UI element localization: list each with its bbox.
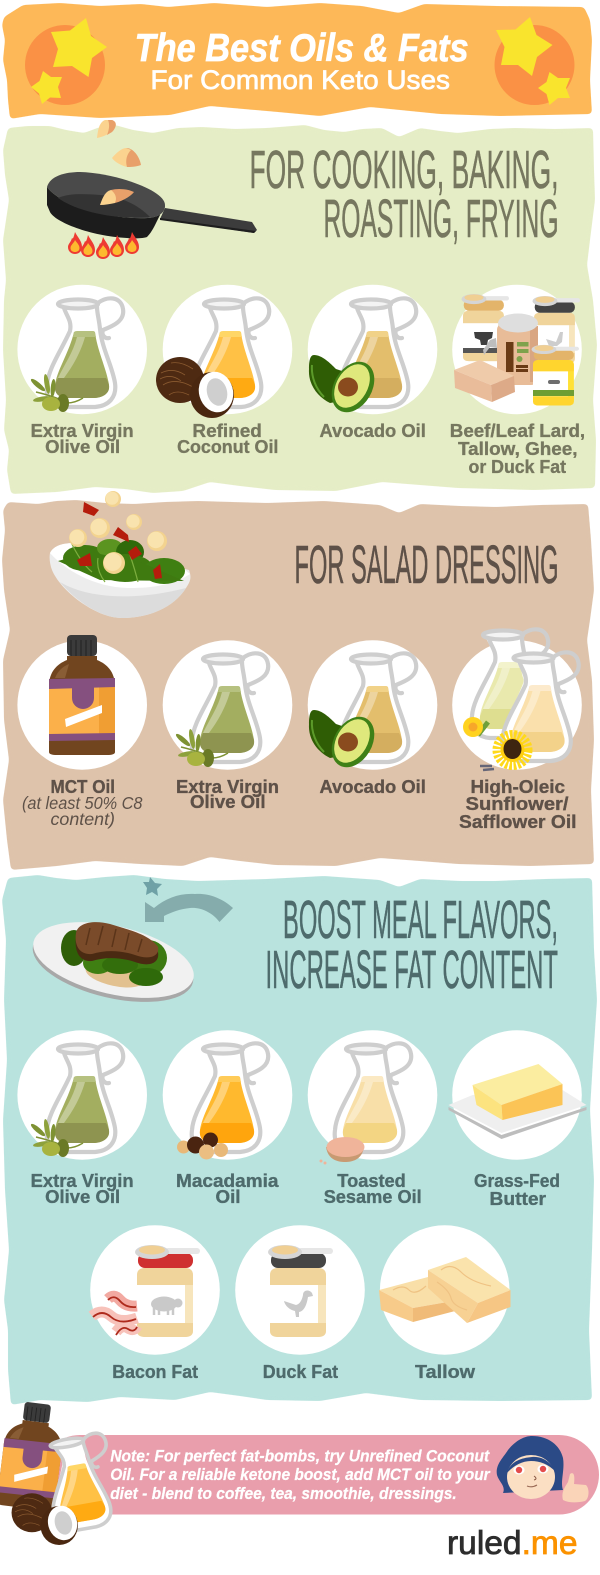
item: avocado oil [308, 285, 437, 441]
note text: Oil. For a reliable ketone boost, add MCT oil to your [110, 1465, 491, 1484]
item: extra virgin olive oil [163, 640, 292, 812]
sunflower [498, 735, 528, 765]
item: sunflower and safflower oil: High-Oleic [470, 776, 565, 797]
item: extra virgin olive oil: Olive Oil [45, 1186, 120, 1207]
item: tallow: Tallow [415, 1361, 476, 1382]
panel background teal [2, 875, 597, 1405]
arrow [145, 894, 233, 922]
item: extra virgin olive oil: Extra Virgin [176, 776, 279, 797]
item: extra virgin olive oil [17, 1030, 147, 1207]
icon: salad bowl [50, 491, 190, 618]
item: bacon fat [90, 1225, 220, 1382]
item: animal fats [450, 285, 585, 477]
item: toasted sesame oil [308, 1030, 437, 1207]
logo: ruled.me: ruled.me [447, 1524, 578, 1561]
item: avocado oil [308, 640, 437, 797]
item: refined coconut oil: Refined [192, 420, 262, 441]
icon: girl with thumbs up [497, 1436, 589, 1502]
bacon strips [92, 1296, 137, 1335]
icon: bottle jug and coconut [0, 1400, 120, 1545]
item: mct oil: (at least 50% C8 [22, 793, 143, 813]
panel: cooking, baking, roasting, frying [3, 120, 597, 494]
right stars [496, 17, 570, 105]
icon: pan over flames with nuts [47, 120, 257, 259]
item: macadamia oil: Macadamia [176, 1170, 279, 1191]
subtitle: For Common Keto Uses [150, 65, 450, 95]
item: extra virgin olive oil: Extra Virgin [31, 420, 134, 441]
item: animal fats: Beef/Leaf Lard, [450, 420, 585, 441]
header banner [2, 3, 592, 119]
panel: boost meal flavors [2, 875, 597, 1405]
safflower [463, 717, 488, 737]
item: extra virgin olive oil [17, 285, 147, 457]
item: mct oil: content) [50, 809, 115, 829]
right circle [494, 25, 574, 105]
nut 1 [97, 120, 116, 138]
title: The Best Oils & Fats [135, 27, 469, 70]
item: mct oil [17, 635, 147, 829]
item: grass-fed butter [448, 1030, 586, 1209]
item: toasted sesame oil: Sesame Oil [324, 1186, 422, 1207]
item: toasted sesame oil: Toasted [337, 1170, 406, 1191]
item: tallow [379, 1225, 510, 1382]
icon: star [143, 877, 162, 896]
item: extra virgin olive oil: Extra Virgin [31, 1170, 134, 1191]
note text [110, 1447, 491, 1503]
item: macadamia oil [163, 1030, 292, 1207]
note text: Note: For perfect fat-bombs, try Unrefined Coconut [110, 1447, 490, 1466]
item: extra virgin olive oil: Olive Oil [190, 791, 266, 812]
heading [266, 890, 558, 1000]
heading [250, 140, 558, 249]
item: duck fat [235, 1225, 365, 1382]
pig [151, 1296, 182, 1315]
nut in pan [100, 189, 134, 205]
icon: steak plate [25, 908, 201, 1016]
item: macadamia oil: Oil [216, 1186, 240, 1207]
item: sunflower and safflower oil [452, 629, 582, 832]
item: refined coconut oil [156, 285, 292, 457]
panel background green [3, 125, 597, 494]
panel: salad dressing [2, 491, 594, 870]
item: extra virgin olive oil: Olive Oil [45, 436, 120, 457]
handle [160, 208, 257, 233]
item: avocado oil: Avocado Oil [320, 776, 426, 797]
callout: note bar [0, 1400, 599, 1545]
item: avocado oil: Avocado Oil [320, 420, 426, 441]
item: refined coconut oil: Coconut Oil [177, 436, 278, 457]
left stars [31, 18, 107, 104]
item: animal fats: or Duck Fat [468, 456, 566, 477]
panel background tan [2, 500, 594, 870]
left circle [25, 25, 105, 105]
item: duck fat: Duck Fat [263, 1361, 338, 1382]
note text: diet - blend to coffee, tea, smoothie, dressings. [110, 1484, 457, 1503]
item: bacon fat: Bacon Fat [112, 1361, 198, 1382]
item: grass-fed butter: Grass-Fed [474, 1170, 560, 1191]
item: mct oil: MCT Oil [50, 776, 115, 797]
item: sunflower and safflower oil: Sunflower/ [466, 793, 568, 814]
pink bar [40, 1435, 599, 1514]
item: grass-fed butter: Butter [490, 1188, 546, 1209]
item: animal fats: Tallow, Ghee, [458, 438, 578, 459]
nut 2 [112, 148, 141, 167]
item: sunflower and safflower oil: Safflower Oil [459, 811, 576, 832]
banner background [2, 3, 592, 119]
